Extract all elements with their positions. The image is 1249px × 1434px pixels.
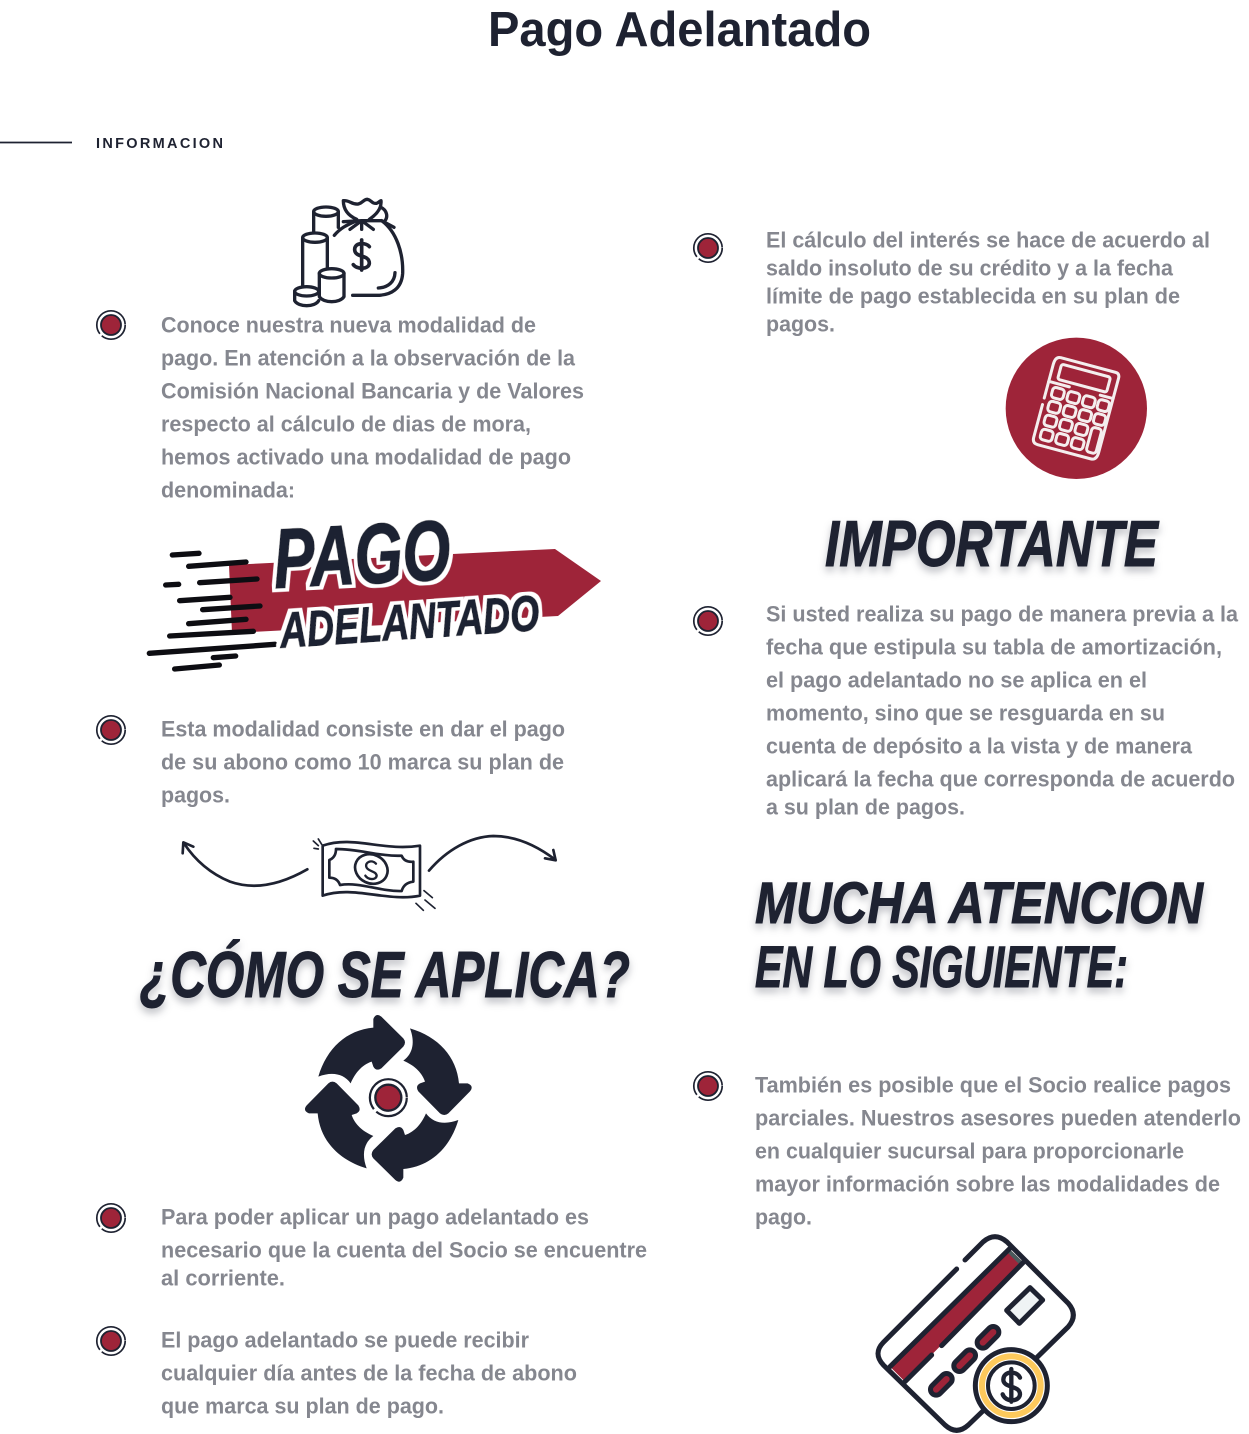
bullet item: pago previo: fecha que estipula su tabla de amortización, <box>766 634 1222 659</box>
icon: credit card with coin <box>878 1237 1073 1430</box>
heading: importante: IMPORTANTE <box>825 507 1159 580</box>
bullet item: calculo del interes: El cálculo del interés se hace de acuerdo al <box>766 227 1210 252</box>
banner: pago adelantado arrow: PAGO <box>271 503 453 606</box>
icon: cycle arrows <box>305 1015 472 1182</box>
bullet item: nueva modalidad: denominada: <box>161 477 295 502</box>
panel: right column <box>694 227 1241 1430</box>
bullet item: calculo del interes: saldo insoluto de su crédito y a la fecha <box>766 255 1174 280</box>
bullet item: en que consiste <box>97 716 565 807</box>
bullet item: calculo del interes: pagos. <box>766 311 835 336</box>
bullet item: pago previo: a su plan de pagos. <box>766 794 965 819</box>
bullet item: nueva modalidad: hemos activado una modalidad de pago <box>161 444 571 469</box>
heading: mucha atencion <box>755 871 1204 1000</box>
section label: informacion: INFORMACION <box>96 136 223 152</box>
banner: pago adelantado arrow: ADELANTADO <box>276 585 541 659</box>
panel: left column <box>97 311 647 1418</box>
bullet item: requisito: necesario que la cuenta del Socio se encuentre <box>161 1237 647 1262</box>
bullet item: cuando se recibe: cualquier día antes de la fecha de abono <box>161 1360 577 1385</box>
bullet item: calculo del interes <box>694 227 1210 336</box>
bullet item: requisito <box>97 1204 647 1290</box>
bullet item: pagos parciales: pago. <box>755 1204 812 1229</box>
bullet item: nueva modalidad: pago. En atención a la observación de la <box>161 345 576 370</box>
bullet item: cuando se recibe: El pago adelantado se puede recibir <box>161 1327 529 1352</box>
bullet item: calculo del interes: límite de pago establecida en su plan de <box>766 283 1180 308</box>
banner: pago adelantado arrow <box>149 503 601 669</box>
bullet item: pagos parciales <box>694 1072 1241 1229</box>
bullet item: cuando se recibe <box>97 1327 577 1418</box>
bullet item: pago previo: aplicará la fecha que corresponda de acuerdo <box>766 766 1235 791</box>
bullet item: en que consiste: Esta modalidad consiste en dar el pago <box>161 716 565 741</box>
bullet item: pagos parciales: mayor información sobre las modalidades de <box>755 1171 1220 1196</box>
bullet item: nueva modalidad: Comisión Nacional Bancaria y de Valores <box>161 378 584 403</box>
icon: banknote with arrows <box>183 836 556 910</box>
bullet item: pagos parciales: en cualquier sucursal para proporcionarle <box>755 1138 1184 1163</box>
title: Pago Adelantado <box>488 3 871 57</box>
bullet item: pago previo: momento, sino que se resguarda en su <box>766 700 1165 725</box>
bullet item: pagos parciales: parciales. Nuestros asesores pueden atenderlo <box>755 1105 1241 1130</box>
bullet item: pago previo: cuenta de depósito a la vista y de manera <box>766 733 1193 758</box>
bullet item: nueva modalidad: respecto al cálculo de dias de mora, <box>161 411 531 436</box>
bullet item: requisito: Para poder aplicar un pago adelantado es <box>161 1204 589 1229</box>
bullet item: pago previo: Si usted realiza su pago de manera previa a la <box>766 601 1239 626</box>
bullet item: en que consiste: de su abono como 10 marca su plan de <box>161 749 564 774</box>
bullet item: cuando se recibe: que marca su plan de pago. <box>161 1393 444 1418</box>
bullet item: pagos parciales: También es posible que el Socio realice pagos <box>755 1072 1231 1097</box>
bullet item: nueva modalidad: Conoce nuestra nueva modalidad de <box>161 312 536 337</box>
bullet item: pago previo <box>694 601 1239 819</box>
icon: money bag and coins <box>295 199 403 306</box>
bullet item: nueva modalidad <box>97 311 584 502</box>
icon: calculator <box>1006 338 1147 479</box>
bullet item: pago previo: el pago adelantado no se aplica en el <box>766 667 1147 692</box>
heading: como se aplica: ¿CÓMO SE APLICA? <box>140 938 630 1011</box>
bullet item: en que consiste: pagos. <box>161 782 230 807</box>
bullet item: requisito: al corriente. <box>161 1265 285 1290</box>
